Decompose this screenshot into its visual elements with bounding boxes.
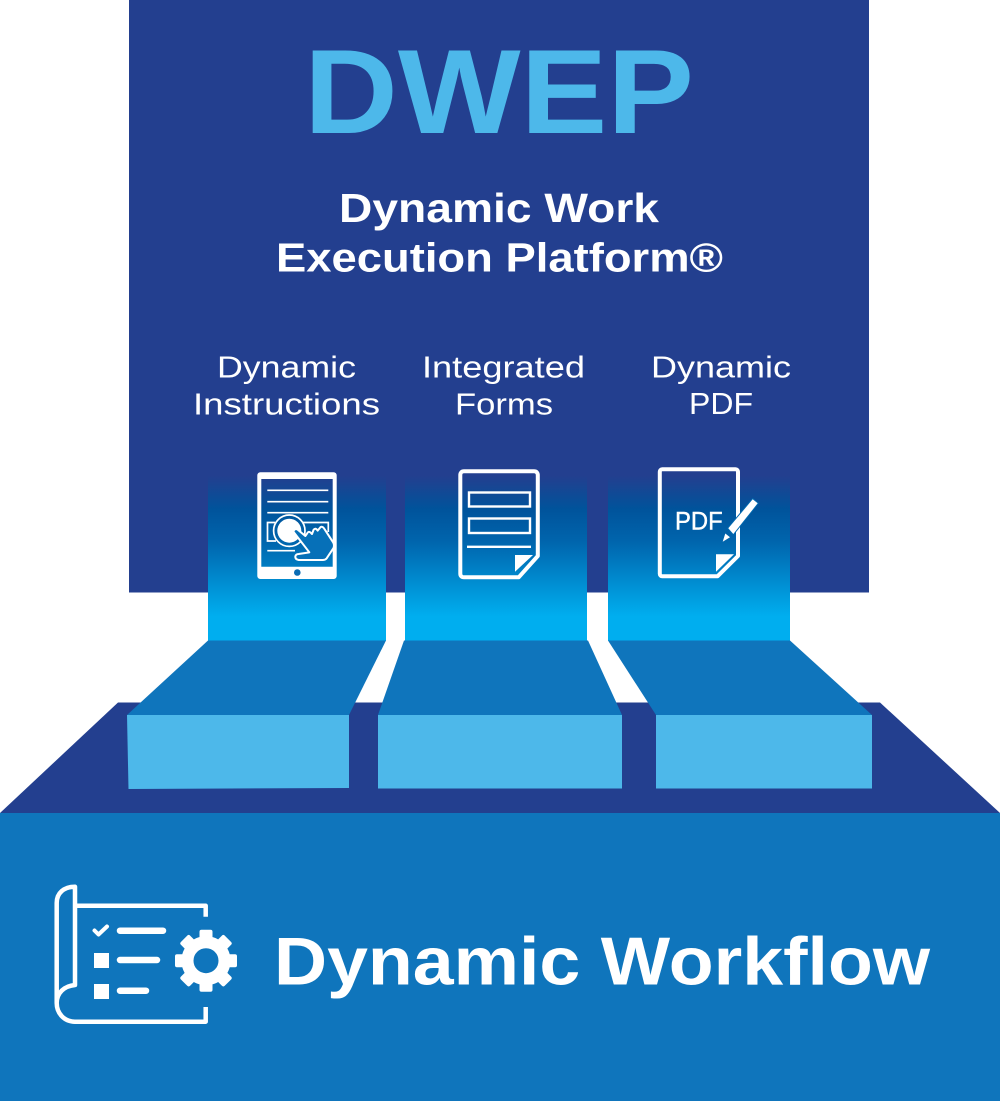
label: Dynamic PDF: Dynamic bbox=[651, 350, 791, 384]
icon: form document bbox=[460, 471, 538, 577]
heading: Dynamic Workflow: Dynamic Workflow bbox=[274, 924, 931, 1000]
column: Integrated Forms band bbox=[378, 476, 622, 788]
label: Dynamic Instructions: Dynamic bbox=[217, 350, 356, 384]
label: Integrated Forms: Integrated bbox=[422, 350, 585, 384]
label: Dynamic Instructions: Instructions bbox=[193, 386, 380, 422]
label: Integrated Forms: Forms bbox=[455, 386, 553, 422]
column: Dynamic Instructions band bbox=[127, 476, 386, 789]
platform: navy top surface bbox=[0, 702, 1000, 813]
icon: workflow blueprint with gear bbox=[57, 887, 237, 1022]
label: Dynamic PDF bbox=[651, 350, 791, 421]
title: DWEP: DWEP bbox=[304, 25, 694, 159]
heading: Dynamic Work Execution Platform: Execution Platform® bbox=[276, 234, 723, 280]
icon: PDF document with pen: PDF bbox=[675, 507, 723, 535]
platform: front face bbox=[0, 813, 1000, 1101]
label: Dynamic PDF: PDF bbox=[689, 386, 753, 421]
label: Dynamic Instructions bbox=[193, 350, 380, 422]
column: Dynamic PDF band bbox=[608, 476, 872, 788]
icon: tablet with tapping hand bbox=[257, 472, 337, 579]
label: Integrated Forms bbox=[422, 350, 585, 422]
heading: Dynamic Work Execution Platform bbox=[276, 185, 723, 280]
icon: PDF document with pen bbox=[660, 469, 758, 576]
heading: Dynamic Work Execution Platform: Dynamic Work bbox=[339, 185, 659, 231]
panel: upper navy background bbox=[129, 0, 869, 592]
